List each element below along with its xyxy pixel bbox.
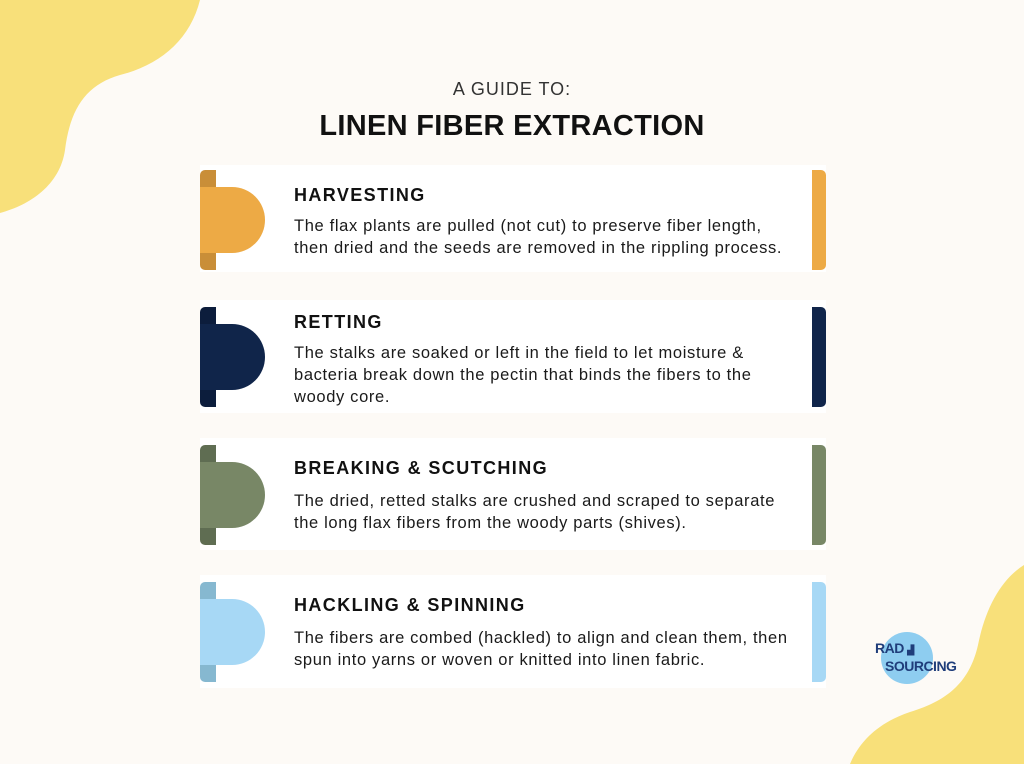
- panel: hackling & spinning: spun into yarns or woven or knitted into linen fabric.: [294, 651, 705, 669]
- panel: breaking & scutching: [200, 438, 826, 550]
- panel: retting: RETTING: [294, 312, 383, 332]
- icon: tab: [200, 582, 265, 682]
- icon: tab: [200, 170, 265, 270]
- panel: hackling & spinning: HACKLING & SPINNING: [294, 595, 526, 615]
- accent bar: [812, 582, 826, 682]
- panel: breaking & scutching: the long flax fibers from the woody parts (shives).: [294, 514, 687, 532]
- panel: harvesting: The flax plants are pulled (not cut) to preserve fiber length,: [294, 217, 762, 235]
- panel: retting: bacteria break down the pectin that binds the fibers to the: [294, 366, 752, 384]
- subtitle: A GUIDE TO:: [453, 79, 571, 99]
- icon: tab: [200, 445, 265, 545]
- panel: retting: The stalks are soaked or left in the field to let moisture &: [294, 344, 744, 362]
- panel: retting: [200, 300, 826, 413]
- accent bar: [812, 307, 826, 407]
- accent bar: [812, 170, 826, 270]
- panel: hackling & spinning: The fibers are combed (hackled) to align and clean them, then: [294, 629, 788, 647]
- panel: breaking & scutching: BREAKING & SCUTCHING: [294, 458, 548, 478]
- panel: harvesting: HARVESTING: [294, 185, 426, 205]
- panel: breaking & scutching: The dried, retted stalks are crushed and scraped to separate: [294, 492, 775, 510]
- title: LINEN FIBER EXTRACTION: [319, 110, 705, 142]
- panel: harvesting: [200, 165, 826, 272]
- logo: RAD Sourcing: RAD ▟: [875, 640, 914, 656]
- panel: retting: woody core.: [294, 388, 390, 406]
- logo: RAD Sourcing: [875, 632, 956, 684]
- panel: harvesting: then dried and the seeds are removed in the rippling process.: [294, 239, 782, 257]
- panel: hackling & spinning: [200, 575, 826, 688]
- accent bar: [812, 445, 826, 545]
- icon: tab: [200, 307, 265, 407]
- logo: RAD Sourcing: SOURCING: [885, 658, 956, 674]
